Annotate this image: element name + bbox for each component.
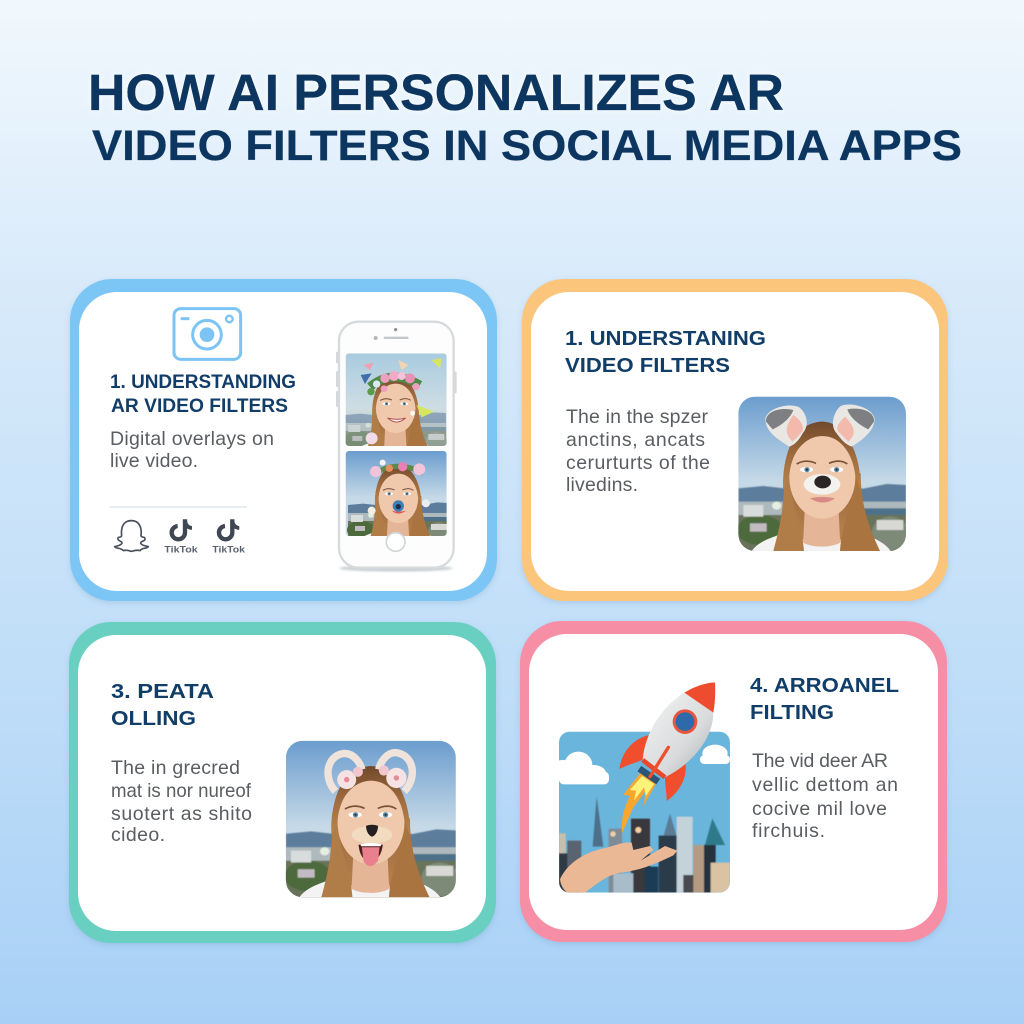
phone screen: flower crown filter <box>344 353 447 453</box>
heading: panel 3: 3. PEATA <box>111 680 214 703</box>
text: panel 1 description: Digital overlays on <box>110 428 274 450</box>
text: panel 4 description <box>752 750 898 842</box>
heading: panel 4: 4. ARROANEL <box>750 674 899 697</box>
title: VIDEO FILTERS IN SOCIAL MEDIA APPS <box>92 122 962 170</box>
text: panel 4 description: vellic dettom an <box>752 774 898 796</box>
panel: data filtering <box>69 622 496 943</box>
heading: panel 1: AR VIDEO FILTERS <box>111 396 288 417</box>
phone mockup <box>336 322 457 572</box>
text: panel 2 description <box>566 406 710 496</box>
title: HOW AI PERSONALIZES AR <box>88 64 784 121</box>
text: panel 3 description: suotert as shito <box>111 803 252 825</box>
heading: panel 3 <box>111 680 214 730</box>
icon: bear muzzle and tongue <box>352 825 392 866</box>
heading: panel 3: OLLING <box>111 707 196 730</box>
icon: rocket <box>619 682 715 833</box>
text: panel 3 description: mat is nor nureof <box>111 780 252 802</box>
title <box>88 64 962 170</box>
text: panel 2 description: The in the spzer <box>566 406 708 428</box>
heading: panel 2 <box>565 327 766 377</box>
text: panel 3 description: cideo. <box>111 824 165 846</box>
icon: fluffy flower ears <box>328 753 412 791</box>
text: panel 3 description <box>111 757 252 846</box>
icon: snapchat ghost <box>115 521 148 551</box>
title: HOW AI PERSONALIZES AR <box>88 64 784 121</box>
illustration: rocket launching from hand over city <box>548 682 730 893</box>
text: panel 4 description: firchuis. <box>752 820 825 842</box>
text: panel 3 description: The in grecred <box>111 757 240 779</box>
heading: panel 1 <box>110 372 296 417</box>
text: panel 1 description: live video. <box>110 450 198 472</box>
icon: TikTok logo: TikTok <box>212 544 245 554</box>
text: panel 1 description <box>110 428 274 472</box>
heading: panel 4 <box>750 674 899 724</box>
text: panel 4 description: cocive mil love <box>752 798 887 820</box>
heading: panel 2: 1. UNDERSTANING <box>565 327 766 350</box>
icon: TikTok logo: TikTok <box>164 544 198 554</box>
icon: dog ears <box>765 405 875 447</box>
panel: AR filtering <box>520 621 947 942</box>
heading: panel 4: FILTING <box>750 701 834 724</box>
icon: TikTok logo <box>212 519 245 554</box>
text: panel 4 description: The vid deer AR <box>752 750 888 772</box>
text: panel 2 description: anctins, ancats <box>566 429 705 451</box>
panel: understanding AR video filters <box>70 279 497 601</box>
icon: camera <box>174 309 241 359</box>
panel: understanding video filters <box>522 279 948 601</box>
icon: dog muzzle <box>804 474 840 495</box>
photo: girl with bear ears and tongue filter <box>284 741 458 898</box>
icon: hand <box>560 843 677 893</box>
text: panel 2 description: livedins. <box>566 474 638 496</box>
text: panel 2 description: cerurturts of the <box>566 452 710 474</box>
phone screen: nose filter <box>346 451 447 536</box>
city photo <box>548 732 730 893</box>
icon: TikTok logo <box>164 519 198 554</box>
heading: panel 2: VIDEO FILTERS <box>565 354 730 377</box>
photo: girl with dog ears filter <box>737 397 908 552</box>
heading: panel 1: 1. UNDERSTANDING <box>110 372 296 393</box>
